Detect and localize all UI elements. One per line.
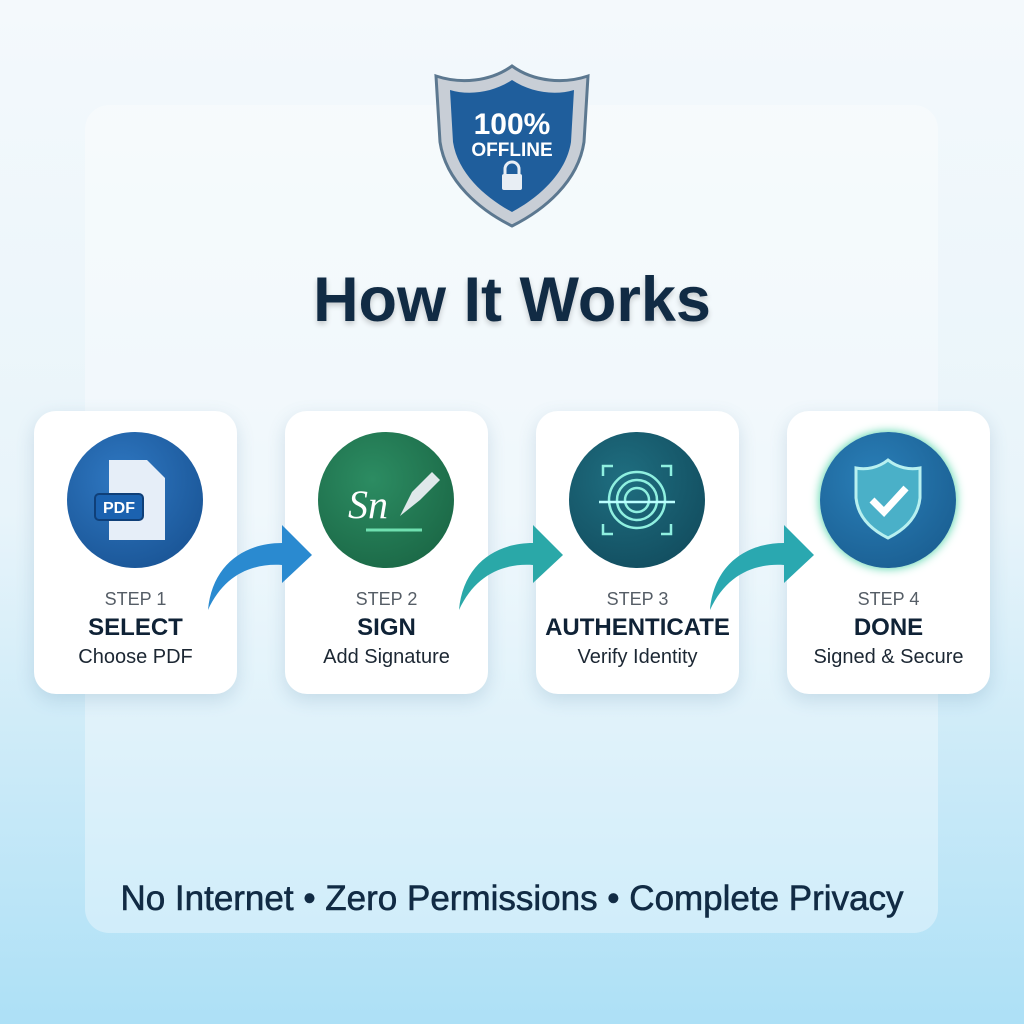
badge: 100% offline shield: 100%	[474, 108, 550, 141]
card: step 3: STEP 3	[607, 589, 668, 609]
card: step 2: STEP 2	[356, 589, 417, 609]
background panel	[85, 105, 938, 933]
icon: fingerprint	[569, 432, 705, 568]
badge: 100% offline shield	[434, 64, 590, 228]
card: step 1	[34, 411, 237, 694]
card: step 1: SELECT	[88, 614, 183, 641]
card: step 1: STEP 1	[105, 589, 166, 609]
title: How It Works	[313, 265, 711, 335]
card: step 4: Signed & Secure	[813, 646, 964, 668]
icon: PDF	[67, 432, 203, 568]
card: step 1: Choose PDF	[78, 646, 193, 668]
card: step 2: SIGN	[357, 614, 416, 641]
card: step 2: Add Signature	[323, 646, 450, 668]
card: step 3: Verify Identity	[577, 646, 698, 668]
card: step 4: STEP 4	[858, 589, 919, 609]
arrow 2	[459, 525, 563, 610]
icon: PDF: PDF	[103, 500, 135, 517]
icon: shield check	[820, 432, 956, 568]
icon: signature pen: Sn	[348, 482, 388, 527]
card: step 3	[536, 411, 739, 694]
badge: 100% offline shield: OFFLINE	[471, 140, 553, 161]
arrow 1	[208, 525, 312, 610]
card: step 3: AUTHENTICATE	[545, 614, 730, 641]
card: step 4	[787, 411, 990, 694]
card: step 4: DONE	[854, 614, 923, 641]
icon: signature pen	[318, 432, 454, 568]
arrow 3	[710, 525, 814, 610]
card: step 2	[285, 411, 488, 694]
footer tagline: No Internet • Zero Permissions • Complete Privacy	[120, 879, 904, 918]
